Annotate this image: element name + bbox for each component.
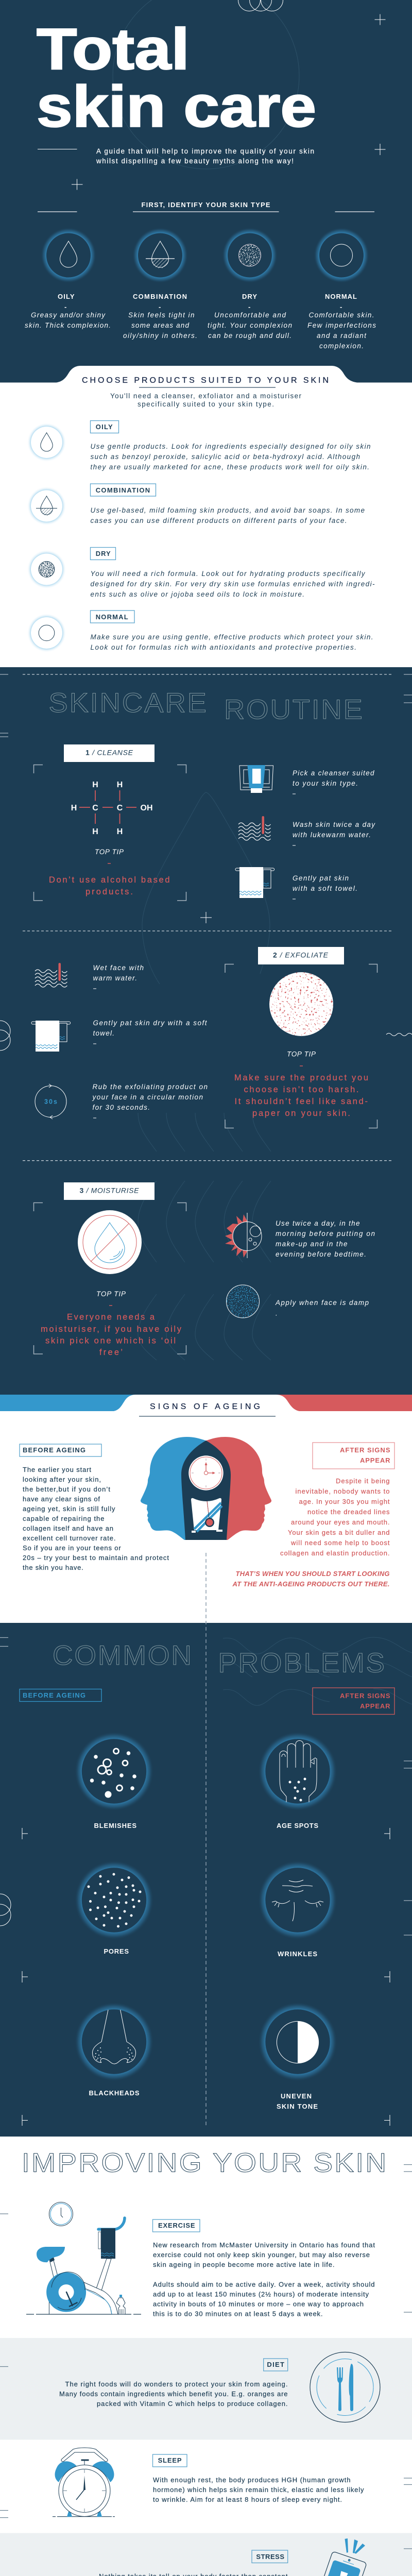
block: before ageing: collagen itself and have an xyxy=(23,1524,113,1532)
step 1 cleanse xyxy=(0,744,412,2576)
top tip: products. xyxy=(85,887,133,896)
block: after signs appear: will need some help to boost xyxy=(290,1539,390,1547)
row: dry xyxy=(27,547,375,598)
text: exercise: exercise could not only keep skin younger, but may also reverse xyxy=(153,2251,370,2259)
skin type: normal: Few imperfections xyxy=(307,321,376,329)
problem: age spots: AGE SPOTS xyxy=(277,1822,318,1829)
icon: nose xyxy=(74,2002,153,2081)
skin type: oily: OILY xyxy=(58,293,75,300)
row: normal: Look out for formulas rich with antioxidants and protective properties. xyxy=(91,643,356,651)
heading xyxy=(53,1640,386,1679)
chart: ethanol molecule: H xyxy=(71,804,77,812)
skin type: oily: skin. Thick complexion. xyxy=(25,321,111,329)
skin type: oily: - xyxy=(64,303,66,311)
label: step 3 xyxy=(64,1182,154,1200)
text: exercise: this is to do 30 minutes on at least 5 days a week. xyxy=(153,2310,322,2317)
row: dry: designed for dry skin. For very dry skin use formulas enriched with ingredi- xyxy=(91,580,375,588)
panel: common problems xyxy=(0,1553,412,2137)
icon: towel xyxy=(31,1021,71,1052)
decorative edge rings xyxy=(0,1021,412,1050)
text: rub product xyxy=(92,1083,208,1118)
skin type: combination: - xyxy=(159,303,161,311)
icon: speckled circle xyxy=(27,550,66,589)
top tip: TOP TIP xyxy=(95,848,124,856)
chart: ethanol molecule: H xyxy=(117,827,123,836)
text: pat skin: with a soft towel. xyxy=(293,885,357,892)
icon: buzzing phone xyxy=(306,2538,369,2576)
label: stress: STRESS xyxy=(256,2553,284,2561)
panel: choose products xyxy=(0,366,412,667)
icon: plain circle xyxy=(27,613,66,652)
skin type: dry: DRY xyxy=(242,293,257,300)
top tip: choose isn’t too harsh. xyxy=(244,1085,358,1094)
block: after signs appear: AFTER SIGNS xyxy=(340,1446,390,1454)
block: before ageing: BEFORE AGEING xyxy=(23,1446,85,1454)
section: exercise xyxy=(26,2202,375,2317)
problem: pores: PORES xyxy=(104,1947,129,1955)
intro text xyxy=(96,147,314,165)
block: before ageing: So if you are in your teens or xyxy=(23,1544,121,1552)
row: dry: ents such as olive or jojoba seed oils to lock in moisture. xyxy=(91,590,304,598)
icon: clock face xyxy=(188,1455,224,1490)
icon: exercise bike xyxy=(26,2202,141,2314)
icon: blemish dots xyxy=(74,1732,153,1811)
text: wet face: Wet face with xyxy=(93,964,144,972)
label: before ageing xyxy=(20,1689,101,1701)
text: pick a cleanser xyxy=(293,769,374,794)
row: oily xyxy=(27,420,371,471)
skin type: normal: complexion. xyxy=(319,342,364,350)
subheading: specifically suited to your skin type. xyxy=(138,400,274,408)
label: diet xyxy=(264,2359,288,2371)
step 3 moisturise xyxy=(34,1182,375,1357)
label: before ageing: BEFORE AGEING xyxy=(23,1691,85,1699)
problem: uneven skin tone xyxy=(258,2002,337,2110)
chart: ethanol molecule: H xyxy=(92,781,98,789)
icon: wrinkled face xyxy=(258,1860,337,1940)
text: rub product: your face in a circular motion xyxy=(92,1093,203,1101)
block: after signs appear: THAT’S WHEN YOU SHOULD START LOOKING xyxy=(236,1570,389,1578)
label: step 2: 2 / EXFOLIATE xyxy=(273,951,329,959)
intro text: A guide that will help to improve the quality of your skin xyxy=(96,147,314,155)
top tip: paper on your skin. xyxy=(252,1109,350,1118)
decorative edge rings xyxy=(0,1894,11,1926)
problem: age spots xyxy=(258,1732,337,1829)
text: use twice a day: Use twice a day, in the xyxy=(276,1219,359,1227)
block: before ageing: The earlier you start xyxy=(23,1466,91,1473)
icon: waves and thermometer xyxy=(238,816,270,840)
row: dry: DRY xyxy=(96,550,111,557)
heading: skincare routine xyxy=(48,688,364,725)
top tip: Don’t use alcohol based xyxy=(49,875,170,885)
chart: ethanol molecule: OH xyxy=(140,804,152,812)
row: normal: Make sure you are using gentle, effective products which protect your skin. xyxy=(91,633,373,641)
row: normal xyxy=(27,611,373,652)
problem: pores xyxy=(74,1860,153,1955)
row: combination: Use gel-based, mild foaming skin products, and avoid bar soaps. In some xyxy=(91,506,365,514)
step 2 exfoliate xyxy=(0,947,412,2576)
subheading xyxy=(110,392,302,408)
text: pat dry xyxy=(93,1019,208,1044)
block: before ageing: the skin you have. xyxy=(23,1564,83,1571)
text: diet xyxy=(59,2380,287,2408)
text: sleep: hormone) which helps skin remain thick, elastic and less likely xyxy=(153,2486,364,2494)
title: skin care xyxy=(37,74,316,139)
top tip xyxy=(41,1290,182,1357)
text: use twice a day xyxy=(276,1219,375,1258)
block: before ageing: have any clear signs of xyxy=(23,1495,100,1503)
problem: uneven skin tone: UNEVEN xyxy=(281,2092,312,2100)
top tip: TOP TIP xyxy=(96,1290,126,1298)
text: diet: The right foods will do wonders to protect your skin from ageing. xyxy=(65,2380,287,2388)
text: exercise: add up to at least 150 minutes (2½ hours) of moderate intensity xyxy=(153,2291,369,2298)
panel: improving your skin xyxy=(0,2137,412,2576)
icon: plate and cutlery xyxy=(310,2352,380,2422)
skin type: combination: Skin feels tight in xyxy=(128,311,195,319)
skin type: normal xyxy=(307,228,376,350)
icon: no oil symbol xyxy=(78,1210,142,1274)
top tip: Make sure the product you xyxy=(234,1073,368,1082)
decorative faint waves xyxy=(138,1113,271,1360)
skin type: combination: some areas and xyxy=(131,321,189,329)
icon: towel xyxy=(235,867,274,898)
problem: blemishes: BLEMISHES xyxy=(94,1822,136,1829)
subheading: You'll need a cleanser, exfoliator and a moisturiser xyxy=(110,392,302,400)
row: oily: Use gentle products. Look for ingredients especially designed for oily skin xyxy=(91,443,371,450)
chart: ethanol molecule: C xyxy=(92,804,98,812)
icon: damp skin xyxy=(227,1285,260,1318)
block: before ageing xyxy=(20,1444,169,1571)
heading: COMMON xyxy=(53,1640,193,1671)
icon: 30 second timer: 30s xyxy=(44,1098,57,1106)
chart: ethanol molecule: C xyxy=(117,804,123,812)
label: step 2 xyxy=(258,947,344,964)
skin type: combination: oily/shiny in others. xyxy=(123,332,197,340)
problem: blackheads xyxy=(74,2002,153,2097)
text: wash skin xyxy=(293,821,375,845)
row: combination: COMBINATION xyxy=(96,486,150,494)
row: dry: You will need a rich formula. Look out for hydrating products specifically xyxy=(91,570,366,578)
icon: cleanser tube xyxy=(239,765,273,793)
icon: pore dots xyxy=(74,1860,153,1940)
heading: IMPROVING YOUR SKIN xyxy=(22,2147,388,2177)
problem: wrinkles xyxy=(258,1860,337,1958)
row: combination: cases you can use different products on different parts of your face. xyxy=(91,517,347,524)
skin type: dry: can be rough and dull. xyxy=(208,332,291,340)
row: oily: such as benzoyl peroxide, salicylic acid or beta-hydroxyl acid. Although xyxy=(91,453,360,461)
label: exercise: EXERCISE xyxy=(158,2222,195,2229)
text: pat dry: Gently pat skin dry with a soft xyxy=(93,1019,208,1027)
intro text: whilst dispelling a few beauty myths along the way! xyxy=(96,157,294,165)
label: after signs appear: APPEAR xyxy=(360,1702,390,1710)
label: diet: DIET xyxy=(267,2361,284,2368)
icon: half-hatched drop xyxy=(27,486,66,526)
icon: alarm clock xyxy=(53,2448,115,2517)
panel: signs of ageing xyxy=(0,1395,412,1623)
label: sleep: SLEEP xyxy=(158,2456,182,2464)
coloured header band xyxy=(0,1395,412,1412)
icon: half-hatched drop xyxy=(132,228,188,283)
block: before ageing: the better,but if you don’t xyxy=(23,1485,110,1493)
text: use twice a day: evening before bedtime. xyxy=(276,1250,366,1258)
panel: skincare routine xyxy=(0,667,412,2576)
text: wash skin: Wash skin twice a day xyxy=(293,821,375,828)
problem: uneven skin tone: SKIN TONE xyxy=(277,2103,318,2110)
heading: CHOOSE PRODUCTS SUITED TO YOUR SKIN xyxy=(82,376,329,385)
skin type: combination: COMBINATION xyxy=(133,293,187,300)
label: after signs appear: AFTER SIGNS xyxy=(340,1692,390,1700)
block: before ageing: excellent cell turnover rate. xyxy=(23,1534,115,1542)
skin type: dry: Uncomfortable and xyxy=(214,311,286,319)
text: exercise: activity in bouts of 10 minutes or more – one way to approach xyxy=(153,2300,364,2308)
section: diet xyxy=(59,2352,380,2422)
top tip xyxy=(234,1050,368,1118)
block: before ageing: 20s – try your best to maintain and protect xyxy=(23,1554,169,1562)
decorative large ring xyxy=(113,0,299,169)
text: pick a cleanser: to your skin type. xyxy=(293,779,358,787)
block: after signs appear: Despite it being xyxy=(336,1477,389,1485)
text: sleep: With enough rest, the body produces HGH (human growth xyxy=(153,2476,350,2484)
heading: skincare routine: SKINCARE xyxy=(48,688,208,718)
label: step 3: 3 / MOISTURISE xyxy=(79,1186,139,1194)
heading: first identify your skin type: FIRST, IDENTIFY YOUR SKIN TYPE xyxy=(141,201,270,209)
text: exercise: skin ageing in people become more active late in life. xyxy=(153,2261,335,2268)
text: diet: Many foods contain ingredients which benefit you. E.g. oranges are xyxy=(59,2390,287,2398)
top tip: skin pick one which is ‘oil xyxy=(45,1336,176,1346)
row: oily: they are usually marketed for acne, these products work well for oily skin. xyxy=(91,463,369,471)
skin type: oily xyxy=(25,228,111,329)
skin type: oily: Greasy and/or shiny xyxy=(31,311,106,319)
top tip xyxy=(49,848,170,896)
chart: ethanol molecule: H xyxy=(92,827,98,836)
text: sleep xyxy=(153,2476,364,2503)
top tip: Everyone needs a xyxy=(67,1313,155,1322)
top tip: TOP TIP xyxy=(287,1050,316,1058)
icon: half circle xyxy=(258,2002,337,2081)
section: stress xyxy=(99,2538,369,2576)
problem: blackheads: BLACKHEADS xyxy=(89,2089,140,2097)
text: rub product: Rub the exfoliating product on xyxy=(93,1083,208,1091)
top tip: free’ xyxy=(99,1348,123,1357)
title xyxy=(37,16,316,139)
text: pat skin xyxy=(293,874,357,899)
skin type: combination xyxy=(123,228,197,340)
skin type: normal: - xyxy=(340,303,342,311)
text: use twice a day: make-up and in the xyxy=(276,1240,347,1248)
section: sleep xyxy=(53,2448,364,2517)
label: exercise xyxy=(152,2219,200,2232)
icon: drop xyxy=(41,228,96,283)
skin type: dry: tight. Your complexion xyxy=(208,321,292,329)
row: oily: OILY xyxy=(96,423,113,431)
chart: ethanol molecule xyxy=(71,781,152,836)
skin type: dry xyxy=(208,228,292,340)
block: before ageing: ageing yet, skin is still fully xyxy=(23,1505,115,1513)
block: after signs appear: Your skin gets a bit duller and xyxy=(288,1529,389,1536)
text: rub product: for 30 seconds. xyxy=(93,1104,150,1111)
chart: ethanol molecule: H xyxy=(117,781,123,789)
icon: speckled circle xyxy=(222,228,278,283)
heading: skincare routine: ROUTINE xyxy=(224,694,364,725)
heading: SIGNS OF AGEING xyxy=(150,1402,260,1411)
text: apply when damp xyxy=(275,1299,369,1317)
text: exercise: Adults should aim to be active daily. Over a week, activity should xyxy=(153,2280,375,2289)
panel: intro and skin types xyxy=(0,0,412,383)
block: after signs appear: age. In your 30s you might xyxy=(299,1498,390,1505)
block: after signs appear: AT THE ANTI-AGEING PRODUCTS OUT THERE. xyxy=(232,1580,389,1588)
text: pat dry: towel. xyxy=(93,1029,114,1037)
problem: blemishes xyxy=(74,1732,153,1829)
skin type: normal: NORMAL xyxy=(325,293,357,300)
label: sleep xyxy=(152,2454,187,2467)
icon: waves and thermometer xyxy=(35,963,67,987)
skin type: normal: and a radiant xyxy=(317,332,367,340)
skin type: normal: Comfortable skin. xyxy=(309,311,374,319)
text: exercise xyxy=(153,2241,375,2317)
icon: hand with spots xyxy=(258,1732,337,1811)
icon: pendulum window xyxy=(191,1498,222,1532)
label: stress xyxy=(252,2550,288,2563)
top tip: It shouldn’t feel like sand- xyxy=(235,1097,368,1106)
text: wash skin: with lukewarm water. xyxy=(293,831,371,839)
text: sleep: to wrinkle. Aim for at least 8 hours of sleep every night. xyxy=(153,2496,342,2503)
text: pat skin: Gently pat skin xyxy=(293,874,349,882)
problem: wrinkles: WRINKLES xyxy=(278,1950,317,1958)
label: step 1: 1 / CLEANSE xyxy=(85,748,133,756)
block: after signs appear: collagen and elastin production. xyxy=(280,1549,389,1557)
block: after signs appear: inevitable, nobody wants to xyxy=(296,1487,389,1495)
text: wet face xyxy=(93,964,144,989)
text: diet: packed with Vitamin C which helps to produce collagen. xyxy=(97,2400,287,2408)
icon: exfoliant speckled disc xyxy=(269,972,333,1036)
label: step 1 xyxy=(64,744,154,762)
text: wet face: warm water. xyxy=(93,974,137,982)
chart: two heads with clock xyxy=(141,1437,271,1540)
block: after signs appear: notice the dreaded lines xyxy=(307,1508,390,1516)
icon: 30 second timer xyxy=(35,1084,66,1119)
text: apply when damp: . xyxy=(276,1310,278,1317)
text: exercise: New research from McMaster University in Ontario has found that xyxy=(153,2241,375,2249)
block: before ageing: looking after your skin, xyxy=(23,1476,101,1483)
icon: plain circle xyxy=(314,228,369,283)
block: after signs appear: around your eyes and mouth. xyxy=(291,1518,389,1526)
icon: sun and moon xyxy=(225,1213,262,1258)
row: combination xyxy=(27,484,365,526)
icon: overlapping rings xyxy=(238,0,283,11)
block: before ageing: capable of repairing the xyxy=(23,1515,104,1522)
decorative faint drop xyxy=(142,792,270,984)
decorative faint waves xyxy=(223,1637,412,1705)
icon: drop xyxy=(27,422,66,462)
text: use twice a day: morning before putting on xyxy=(276,1230,375,1238)
row: normal: NORMAL xyxy=(96,613,128,621)
top tip: moisturiser, if you have oily xyxy=(41,1325,182,1334)
text: pick a cleanser: Pick a cleanser suited xyxy=(293,769,374,777)
title: Total xyxy=(37,16,190,81)
block: after signs appear xyxy=(232,1443,394,1588)
block: after signs appear: APPEAR xyxy=(360,1456,390,1464)
text: apply when damp: Apply when face is damp xyxy=(275,1299,369,1307)
skin type: dry: - xyxy=(248,303,250,311)
heading: PROBLEMS xyxy=(218,1648,386,1679)
label: after signs appear xyxy=(313,1688,394,1715)
